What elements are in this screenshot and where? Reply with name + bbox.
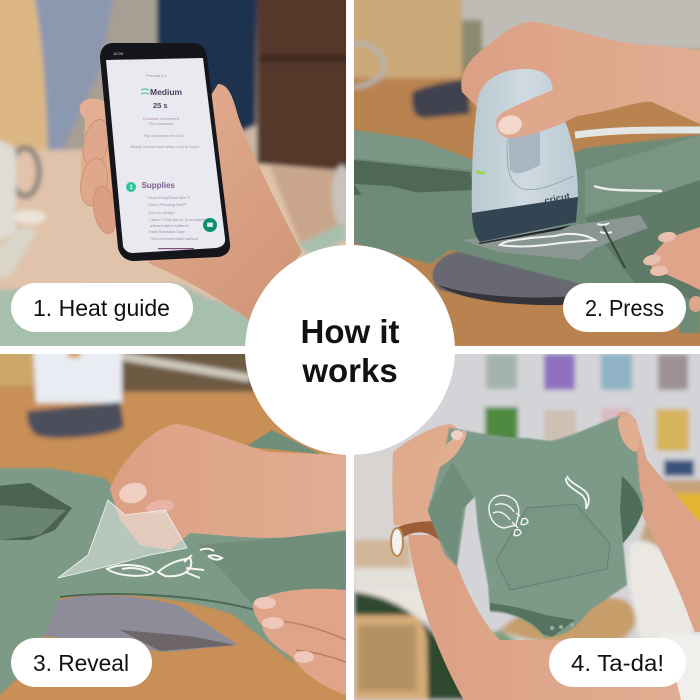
fingers on the right bbox=[642, 227, 700, 312]
white iron-on design bbox=[107, 549, 222, 578]
fingers right bbox=[618, 415, 640, 452]
phone screen bbox=[106, 58, 225, 253]
brand mark: cricut bbox=[543, 191, 572, 207]
supplies heading: 1 bbox=[130, 185, 134, 191]
supplies heading: Supplies bbox=[142, 181, 175, 190]
label: step 2 bbox=[563, 283, 686, 332]
thumb left bbox=[430, 430, 466, 470]
green shirt bbox=[0, 430, 346, 695]
phone screen text: Cricut EasyPress Mini™ bbox=[147, 195, 190, 200]
phone screen text: Firm pressure bbox=[149, 121, 174, 126]
photo background: wall, chair, table bbox=[344, 0, 700, 360]
kangaroo pocket bbox=[496, 504, 610, 590]
hand at bottom right bbox=[253, 589, 346, 695]
hand holding phone bbox=[76, 84, 302, 320]
phone screen text: Heat Resistant Tape bbox=[149, 229, 186, 234]
label: step 3 bbox=[11, 638, 152, 687]
phone screen text: Preheat 5 s bbox=[146, 73, 166, 78]
phone screen text: Slowly remove liner when cool to touch bbox=[130, 144, 199, 149]
panel: step 4 ta-da bbox=[344, 344, 700, 700]
heat setting bbox=[140, 88, 182, 108]
panel: step 2 press bbox=[344, 0, 700, 360]
watch bbox=[391, 521, 444, 556]
photo background: wall, posters, sofa, chair bbox=[344, 344, 700, 700]
mini iron bbox=[472, 69, 578, 244]
phone bbox=[100, 43, 230, 261]
phone screen text: Constant movement bbox=[143, 116, 180, 121]
label: step 4 bbox=[549, 638, 686, 687]
phone screen text: *Not recommended without bbox=[150, 236, 199, 241]
label: step 2: 2. Press bbox=[585, 295, 664, 321]
lower shirt seam bbox=[60, 594, 262, 612]
green onesie bbox=[428, 416, 643, 638]
chat button bbox=[203, 218, 217, 232]
hand back of fingers bbox=[461, 22, 700, 124]
clear transfer film bbox=[58, 500, 187, 578]
photo background: table and iron bbox=[0, 344, 356, 700]
right arm and hand bbox=[617, 412, 700, 632]
label: step 3: 3. Reveal bbox=[33, 650, 129, 676]
phone screen text: Flip and press for 15 s bbox=[144, 133, 184, 138]
phone screen text: Iron-on design bbox=[149, 210, 175, 215]
phone screen text: Cricut Pressing Mat™ bbox=[148, 202, 187, 207]
title: works bbox=[301, 352, 398, 389]
hand peeling film bbox=[110, 424, 346, 550]
supplies heading bbox=[126, 182, 174, 192]
chest design bbox=[489, 476, 589, 536]
phone screen text bbox=[113, 51, 206, 241]
label: step 1 bbox=[11, 283, 193, 332]
heat setting: 25 s bbox=[153, 101, 168, 110]
phone screen text: Cotton / Poly blend, preweighed bbox=[149, 217, 206, 222]
photo background: blurred room and table bbox=[0, 0, 360, 360]
heat pad bbox=[433, 251, 585, 305]
phone screen text: without fabric softener bbox=[150, 223, 190, 228]
power cord bbox=[575, 130, 700, 135]
label: step 1: 1. Heat guide bbox=[33, 295, 170, 321]
title: How it bbox=[301, 313, 400, 350]
transfer film with design bbox=[462, 186, 662, 268]
panel: step 1 heat guide bbox=[0, 0, 360, 360]
center badge: how it works bbox=[245, 245, 455, 455]
thumb bbox=[496, 89, 577, 138]
phone screen text: 10:39 bbox=[113, 51, 124, 56]
green shirt bbox=[354, 130, 700, 333]
snap buttons bbox=[550, 623, 574, 630]
heat pad bbox=[40, 596, 238, 652]
panel: step 3 reveal bbox=[0, 344, 356, 700]
label: step 4: 4. Ta-da! bbox=[571, 650, 664, 676]
left arm and hand bbox=[392, 424, 682, 700]
heat setting: Medium bbox=[150, 87, 183, 97]
